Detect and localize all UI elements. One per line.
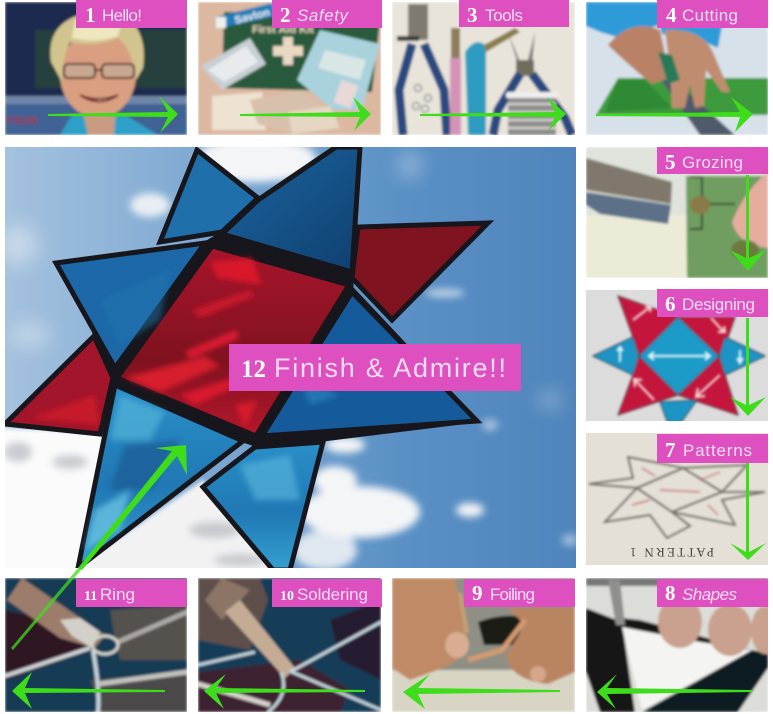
label: 8 Shapes: 8 [665, 581, 676, 605]
panel: 10 Soldering [198, 578, 382, 712]
label: 10 Soldering: Soldering [297, 585, 368, 604]
label: 4 Cutting: 4 [666, 3, 677, 27]
label: 7 Patterns: Patterns [683, 441, 752, 460]
panel: 3 Tools [392, 0, 575, 135]
panel: 1 Hello: YSON [6, 115, 37, 127]
panel: 7 Patterns [586, 433, 768, 565]
arrow: step 2 [240, 97, 371, 131]
label: 3 Tools [459, 0, 569, 27]
label: 10 Soldering: 10 [280, 589, 294, 604]
label: 4 Cutting [657, 0, 768, 28]
label: 9 Foiling [464, 579, 575, 607]
arrow: step 1 [48, 96, 178, 133]
label: 5 Grozing [657, 147, 768, 174]
label: 11 Ring: 11 [84, 589, 97, 604]
glass streaks [30, 258, 340, 550]
arrow: step 3 [420, 97, 566, 131]
label: 12 Finish and Admire: 12 [241, 356, 266, 383]
panel: 9 Foiling [392, 578, 575, 712]
clouds [0, 141, 562, 410]
label: 8 Shapes [657, 579, 768, 607]
panel: 4 Cutting [586, 0, 768, 135]
panel: 8 Shapes [586, 578, 773, 712]
star [5, 147, 488, 570]
label: 10 Soldering [272, 579, 382, 607]
label: 9 Foiling: Foiling [490, 585, 535, 604]
label: 8 Shapes: Shapes [682, 585, 738, 604]
panel: 5 Grozing [586, 147, 768, 278]
arrow: step 7 [730, 463, 766, 560]
label: 12 Finish and Admire [229, 344, 521, 391]
white cloud lower left [0, 428, 290, 572]
arrow: step 11 [12, 672, 165, 709]
label: 12 Finish and Admire: Finish & Admire!! [274, 353, 506, 383]
arrow: step 4 [596, 97, 753, 132]
label: 2 Safety: Safety [297, 6, 350, 25]
label: 5 Grozing: 5 [665, 150, 676, 174]
label: 3 Tools: Tools [485, 6, 523, 25]
label: 11 Ring [76, 579, 187, 607]
label: 1 Hello: Hello! [102, 6, 142, 25]
label: 9 Foiling: 9 [472, 581, 482, 605]
arrow: step 8 [597, 674, 752, 709]
panel: 12 main star photo [0, 138, 578, 572]
label: 1 Hello: 1 [85, 3, 96, 27]
label: 5 Grozing: Grozing [682, 153, 743, 172]
label: 1 Hello [76, 0, 187, 28]
panel: 1 Hello [5, 0, 187, 135]
label: 6 Designing [657, 289, 768, 317]
panel: 11 Ring [5, 578, 187, 712]
panel: 6 Designing [586, 289, 768, 424]
arrow: step 6 [730, 318, 766, 416]
arrow: step 10 [204, 674, 365, 709]
label: 2 Safety [272, 0, 382, 28]
label: 7 Patterns: 7 [665, 438, 676, 462]
star lead underlay [94, 233, 477, 445]
panel: 2 Safety: Savlon [233, 6, 271, 27]
label: 7 Patterns [657, 434, 768, 463]
label: 4 Cutting: Cutting [682, 6, 738, 25]
panel: 2 Safety: First Aid Kit [252, 24, 314, 36]
label: 3 Tools: 3 [467, 3, 478, 27]
panel: 2 Safety [198, 0, 382, 135]
arrow: step 5 [730, 175, 766, 271]
label: 2 Safety: 2 [280, 3, 290, 27]
arrow: step 9 [403, 674, 560, 709]
upside-down caption: PATTERN 1 [630, 545, 714, 560]
label: 11 Ring: Ring [100, 585, 135, 604]
label: 6 Designing: 6 [665, 292, 676, 316]
label: 6 Designing: Designing [682, 295, 755, 314]
arrow: step 12 [11, 445, 187, 650]
